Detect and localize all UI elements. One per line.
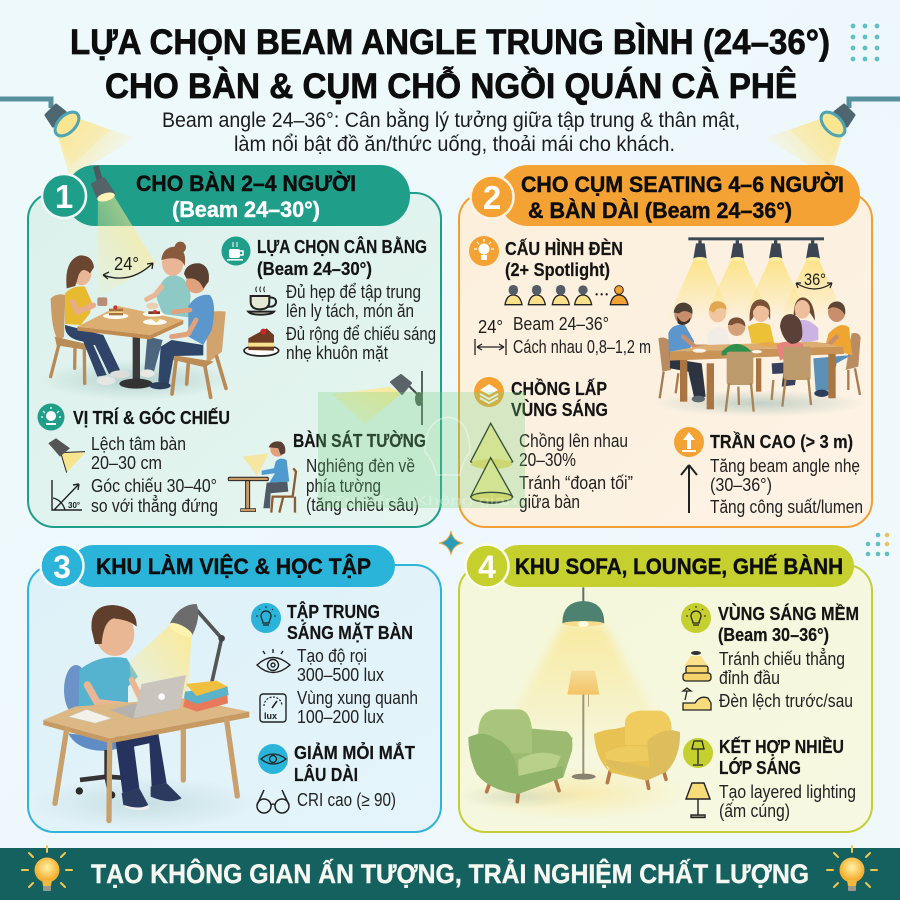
text block: balanced choice: (Beam 24–30°) xyxy=(257,258,372,279)
header pill 2 xyxy=(470,165,860,226)
icon: row of people xyxy=(505,285,628,305)
text block: overlapping light zones: Tránh “đoạn tối” xyxy=(519,473,633,493)
text block: position and angle: Góc chiếu 30–40° xyxy=(91,476,217,496)
panel 3: work and study area xyxy=(28,544,441,832)
text block: soft light zone: (Beam 30–36°) xyxy=(718,624,829,645)
subtitle: Beam angle 24–36°: Cân bằng lý tưởng giữa tập trung & thân mật, xyxy=(162,109,740,132)
icon: layers badge xyxy=(474,377,504,407)
icon: sofa under lamp xyxy=(683,651,711,681)
text block: reduce eye strain: CRI cao (≥ 90) xyxy=(297,790,396,810)
text block: table against wall: (tăng chiều sâu) xyxy=(306,495,419,515)
panel 4: sofa and lounge area xyxy=(457,544,872,832)
icon: bulb badge xyxy=(469,236,499,266)
text block: reduce eye strain: GIẢM MỎI MẮT xyxy=(294,742,416,763)
text block: balanced choice: Đủ hẹp để tập trung xyxy=(286,282,421,302)
watermark xyxy=(318,392,525,508)
text block: light configuration: Cách nhau 0,8–1,2 m xyxy=(513,337,651,357)
title xyxy=(70,22,830,106)
text block: position and angle: so với thẳng đứng xyxy=(91,495,218,516)
icon: lux meter: lux xyxy=(264,711,277,721)
icon: bulb badge xyxy=(251,603,281,633)
text block: table against wall: phía tường xyxy=(306,476,381,496)
text block: focus on table surface: 300–500 lux xyxy=(297,665,384,685)
text block: high ceiling: Tăng beam angle nhẹ xyxy=(710,456,860,476)
header pill 4: KHU SOFA, LOUNGE, GHẾ BÀNH xyxy=(515,554,843,579)
icon: coffee badge xyxy=(222,236,250,266)
icon: 30 degree angle xyxy=(52,480,82,510)
text block: balanced choice: Đủ rộng để chiếu sáng xyxy=(286,324,436,344)
text block: position and angle xyxy=(38,404,230,516)
text block: focus on table surface: SÁNG MẶT BÀN xyxy=(287,622,413,643)
angle label: 36°: 36° xyxy=(804,270,826,289)
illustration: pendant, floor lamp and two armchairs xyxy=(457,587,690,820)
header pill 2: & BÀN DÀI (Beam 24–36°) xyxy=(528,198,792,223)
footer text: TẠO KHÔNG GIAN ẤN TƯỢNG, TRẢI NGHIỆM CHẤT LƯỢNG xyxy=(91,857,809,889)
panel 2: seating cluster 4-6 people xyxy=(459,165,872,527)
header pill 1: (Beam 24–30°) xyxy=(172,197,320,222)
text block: focus on table surface: Tạo độ rọi xyxy=(297,646,367,666)
icon: 30 degree angle: 30° xyxy=(68,501,80,510)
text block: focus on table surface: 100–200 lux xyxy=(297,707,384,727)
pendant lamp and light beam xyxy=(92,165,156,298)
text block: balanced choice xyxy=(222,236,436,363)
header pill 3: KHU LÀM VIỆC & HỌC TẬP xyxy=(96,554,371,579)
icon: bulb badge xyxy=(681,603,711,633)
text block: table against wall xyxy=(293,430,426,515)
text block: high ceiling xyxy=(674,427,863,517)
header pill 2: 2 xyxy=(483,179,501,216)
header pill 1: CHO BÀN 2–4 NGƯỜI xyxy=(136,171,356,196)
illustration: person working at desk with lamp xyxy=(30,604,257,830)
text block: high ceiling: (30–36°) xyxy=(710,475,772,495)
decorative dot grid: top right xyxy=(851,24,879,61)
icon: spacing arrow xyxy=(475,339,506,355)
text block: table against wall: BÀN SÁT TƯỜNG xyxy=(293,430,426,451)
text block: light configuration: Beam 24–36° xyxy=(513,314,609,334)
text block: layered lighting xyxy=(683,736,856,821)
text block: soft light zone: Đèn lệch trước/sau xyxy=(719,691,853,711)
text block: soft light zone: VÙNG SÁNG MỀM xyxy=(718,603,859,624)
icon: top-right spotlight xyxy=(765,99,900,178)
icon: cake slice xyxy=(244,328,279,356)
text block: overlapping light zones: CHỒNG LẤP xyxy=(511,378,607,399)
text block: focus on table surface: Vùng xung quanh xyxy=(297,688,418,708)
text block: light configuration: 24° xyxy=(478,317,503,337)
text block: reduce eye strain: LÂU DÀI xyxy=(294,764,358,785)
panel 1: table for 2-4 people xyxy=(28,165,441,527)
header pill 4 xyxy=(466,544,854,588)
header pill 1 xyxy=(42,165,410,226)
icon: eye with rays xyxy=(257,649,290,672)
text block: overlapping light zones: 20–30% xyxy=(519,450,576,470)
header pill 4: 4 xyxy=(478,549,496,585)
text block: focus on table surface xyxy=(251,601,418,727)
footer banner xyxy=(0,846,900,900)
text block: balanced choice: LỰA CHỌN CÂN BẰNG xyxy=(257,236,427,257)
arrow: upward xyxy=(681,465,697,513)
angle label: 24° xyxy=(103,254,153,279)
icon: lux meter xyxy=(260,694,286,722)
icon: overlapping cones xyxy=(471,423,513,503)
text block: high ceiling: TRẦN CAO (> 3 m) xyxy=(710,431,853,452)
icon: tilted spot lamp xyxy=(48,438,85,473)
subtitle xyxy=(162,109,740,156)
icon: floor lamp badge xyxy=(683,738,713,768)
text block: reduce eye strain xyxy=(257,742,416,813)
text block: light configuration: CẤU HÌNH ĐÈN xyxy=(505,238,623,259)
angle label: 24°: 24° xyxy=(114,254,139,274)
illustration: three people at a cafe table xyxy=(40,242,233,400)
text block: focus on table surface: TẬP TRUNG xyxy=(287,601,380,622)
text block: balanced choice: lên ly tách, món ăn xyxy=(286,301,414,321)
icon: seated person at wall table xyxy=(228,441,296,513)
decorative dot grid: lower right xyxy=(866,533,889,556)
text block: position and angle: VỊ TRÍ & GÓC CHIẾU xyxy=(73,407,230,428)
text block: table against wall: Nghiêng đèn về xyxy=(306,456,415,476)
icon: top-left spotlight xyxy=(0,99,135,178)
text block: balanced choice: nhẹ khuôn mặt xyxy=(286,343,388,363)
watermark: Tư vấn - Không gian xyxy=(332,493,517,508)
title: LỰA CHỌN BEAM ANGLE TRUNG BÌNH (24–36°) xyxy=(70,22,830,62)
icon: left light bulb xyxy=(22,846,72,891)
icon: steaming cup xyxy=(248,287,276,315)
illustration: track lights over a long table with six people xyxy=(652,237,865,417)
text block: high ceiling: Tăng công suất/lumen xyxy=(710,497,863,517)
icon: sun-lamp badge xyxy=(38,404,64,430)
icon: glasses xyxy=(257,790,289,813)
text block: overlapping light zones: VÙNG SÁNG xyxy=(511,399,608,420)
text block: layered lighting: KẾT HỢP NHIỀU xyxy=(719,736,844,757)
header pill 3 xyxy=(40,544,395,588)
text block: overlapping light zones: Chồng lên nhau xyxy=(519,431,628,451)
icon: table lamp xyxy=(686,783,710,818)
icon: wall lamp xyxy=(332,371,423,425)
text block: soft light zone xyxy=(681,603,859,711)
header pill 1: 1 xyxy=(55,178,73,215)
text block: position and angle: 20–30 cm xyxy=(91,453,162,473)
subtitle: làm nổi bật đồ ăn/thức uống, thoải mái cho khách. xyxy=(234,133,675,156)
text block: layered lighting: (ấm cúng) xyxy=(719,801,790,821)
text block: overlapping light zones: giữa bàn xyxy=(519,492,580,512)
text block: position and angle: Lệch tâm bàn xyxy=(91,434,186,454)
icon: person on sofa with lamp xyxy=(683,688,711,710)
text block: soft light zone: đỉnh đầu xyxy=(719,668,780,688)
header pill 3: 3 xyxy=(53,549,71,585)
text block: light configuration: (2+ Spotlight) xyxy=(505,259,610,280)
text block: layered lighting: Tạo layered lighting xyxy=(719,782,856,802)
icon: up arrow badge xyxy=(674,427,704,457)
text block: layered lighting: LỚP SÁNG xyxy=(719,757,801,778)
icon: right light bulb xyxy=(827,846,877,891)
decorative star xyxy=(439,531,463,555)
icon: eye badge xyxy=(258,744,288,774)
text block: overlapping light zones xyxy=(471,377,633,512)
title: CHO BÀN & CỤM CHỖ NGỒI QUÁN CÀ PHÊ xyxy=(105,66,797,106)
header pill 2: CHO CỤM SEATING 4–6 NGƯỜI xyxy=(521,172,844,197)
text block: light configuration xyxy=(469,236,651,357)
text block: soft light zone: Tránh chiếu thẳng xyxy=(719,648,845,669)
